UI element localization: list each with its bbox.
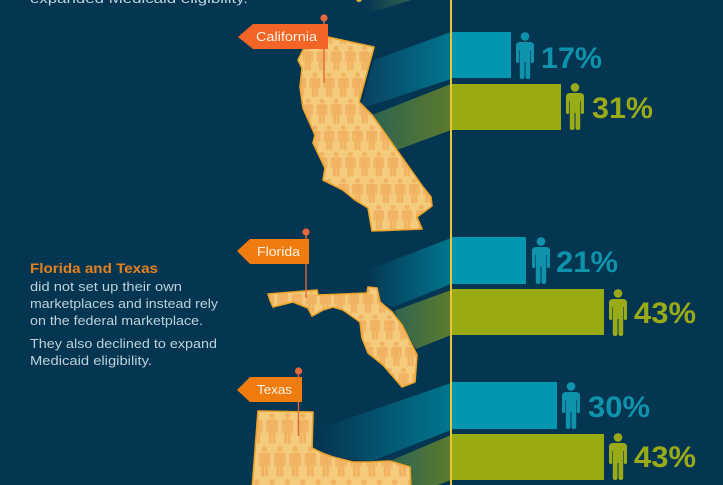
California uninsured bar, teal: 17%: [541, 42, 602, 75]
Florida teal connector: [368, 238, 451, 307]
top marker remnant: [356, 0, 362, 2]
top green band remnant: [345, 0, 411, 14]
text paragraph one: [30, 279, 218, 328]
California flag: [238, 14, 328, 83]
Texas uninsured bar, green: 43%: [634, 441, 696, 474]
Florida flag: Florida: [257, 244, 301, 259]
Texas teal connector: [312, 383, 451, 461]
California uninsured bar, teal: [451, 32, 602, 79]
Florida map: [268, 287, 417, 387]
text paragraph one: marketplaces and instead rely: [30, 296, 218, 311]
Texas map: [252, 411, 411, 485]
text heading: Florida and Texas: [30, 261, 158, 276]
text paragraph two: They also declined to expand: [30, 336, 217, 351]
text paragraph one: on the federal marketplace.: [30, 313, 203, 328]
California flag: California: [256, 29, 318, 44]
panel: Texas: [237, 367, 696, 485]
California uninsured bar, green: 31%: [592, 92, 653, 125]
California map: [298, 37, 432, 231]
Florida uninsured bar, teal: [451, 237, 618, 284]
panel: Florida: [237, 228, 696, 387]
text paragraph one: did not set up their own: [30, 279, 182, 294]
panel: California: [238, 14, 653, 231]
California green connector: [372, 84, 451, 150]
vertical divider line: [450, 0, 452, 485]
Florida uninsured bar, teal: 21%: [556, 246, 618, 279]
Texas uninsured bar, teal: [451, 382, 650, 429]
text paragraph two: Medicaid eligibility.: [30, 353, 152, 368]
Florida flag: [237, 228, 310, 298]
Florida green connector: [394, 290, 451, 349]
text paragraph two: [30, 336, 217, 368]
text block: Florida and Texas: [30, 261, 218, 368]
Texas green connector: [390, 435, 451, 485]
Florida uninsured bar, green: [451, 289, 696, 336]
Florida uninsured bar, green: 43%: [634, 297, 696, 330]
Texas uninsured bar, teal: 30%: [588, 391, 650, 424]
California teal connector: [360, 32, 451, 109]
Texas flag: [237, 367, 302, 436]
Texas uninsured bar, green: [451, 433, 696, 480]
California uninsured bar, green: [451, 83, 653, 130]
Texas flag: Texas: [257, 382, 293, 397]
